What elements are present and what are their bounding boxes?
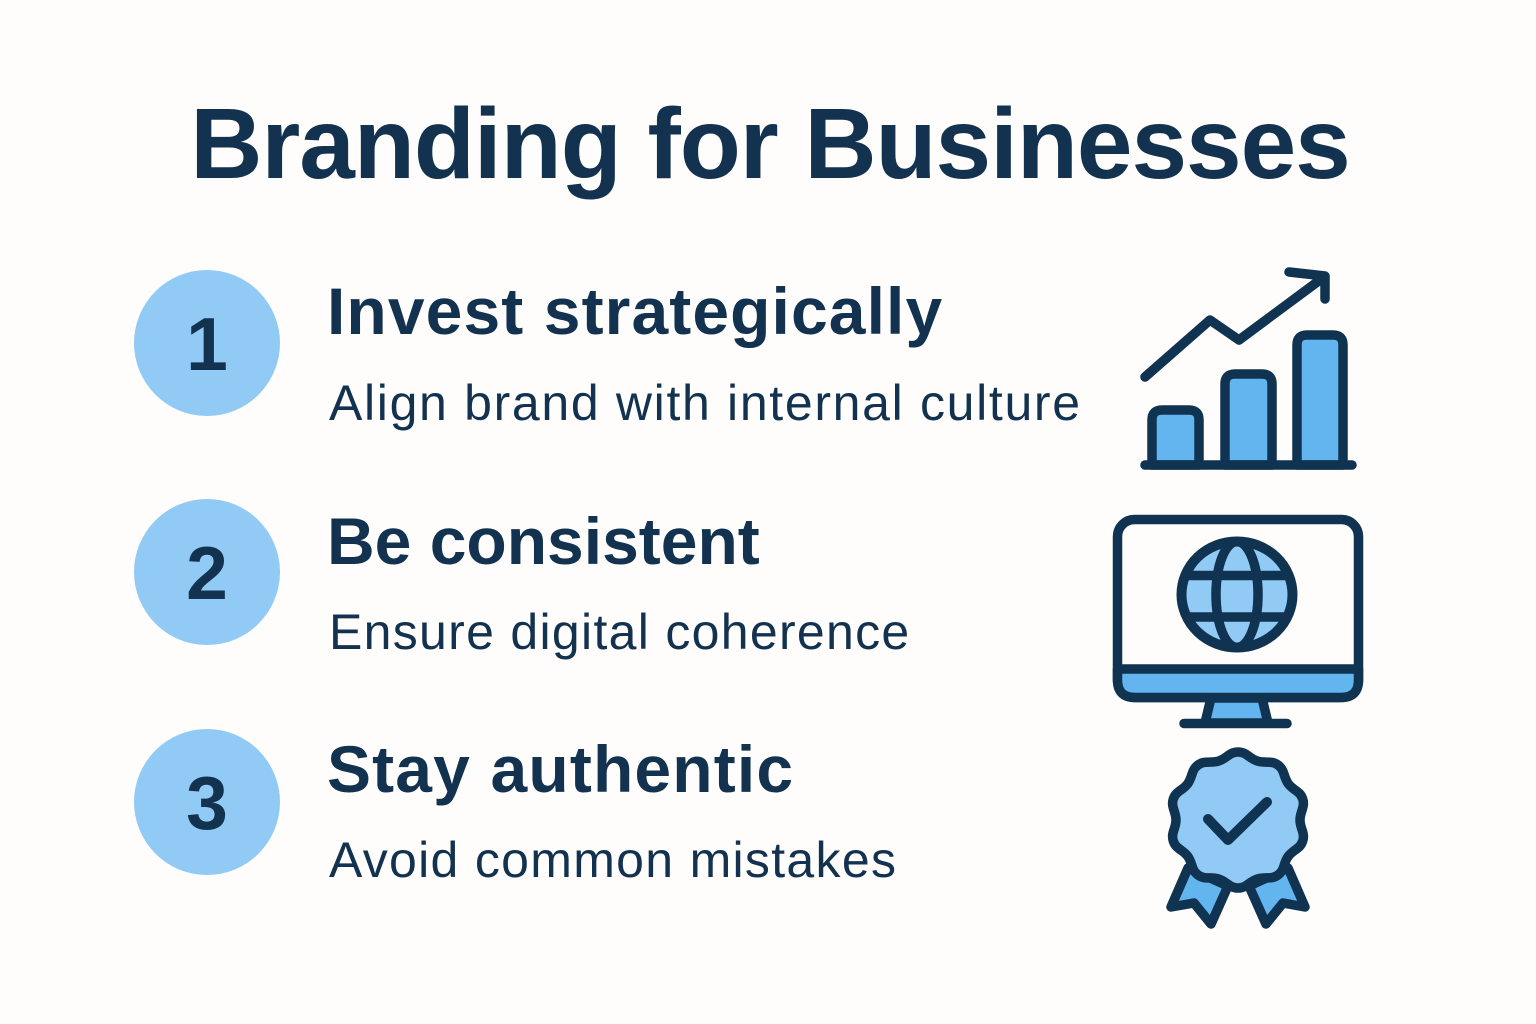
number badge 2: 2 — [186, 531, 228, 615]
number badge 2 — [134, 499, 280, 645]
number badge 1: 1 — [186, 302, 228, 386]
heading 2: Be consistent — [327, 504, 760, 578]
heading 1: Invest strategically — [327, 274, 943, 348]
number badge 1 — [134, 270, 280, 416]
text 2: Ensure digital coherence — [329, 604, 911, 660]
text 3: Avoid common mistakes — [329, 832, 897, 888]
icon: monitor with globe — [1118, 520, 1358, 724]
number badge 3: 3 — [186, 761, 228, 845]
number badge 3 — [134, 729, 280, 875]
icon: growth bar chart with arrow — [1145, 272, 1352, 465]
text 1: Align brand with internal culture — [329, 375, 1082, 431]
title: Branding for Businesses — [190, 88, 1350, 200]
heading 3: Stay authentic — [327, 732, 794, 806]
icon: award badge with checkmark — [1171, 752, 1305, 924]
